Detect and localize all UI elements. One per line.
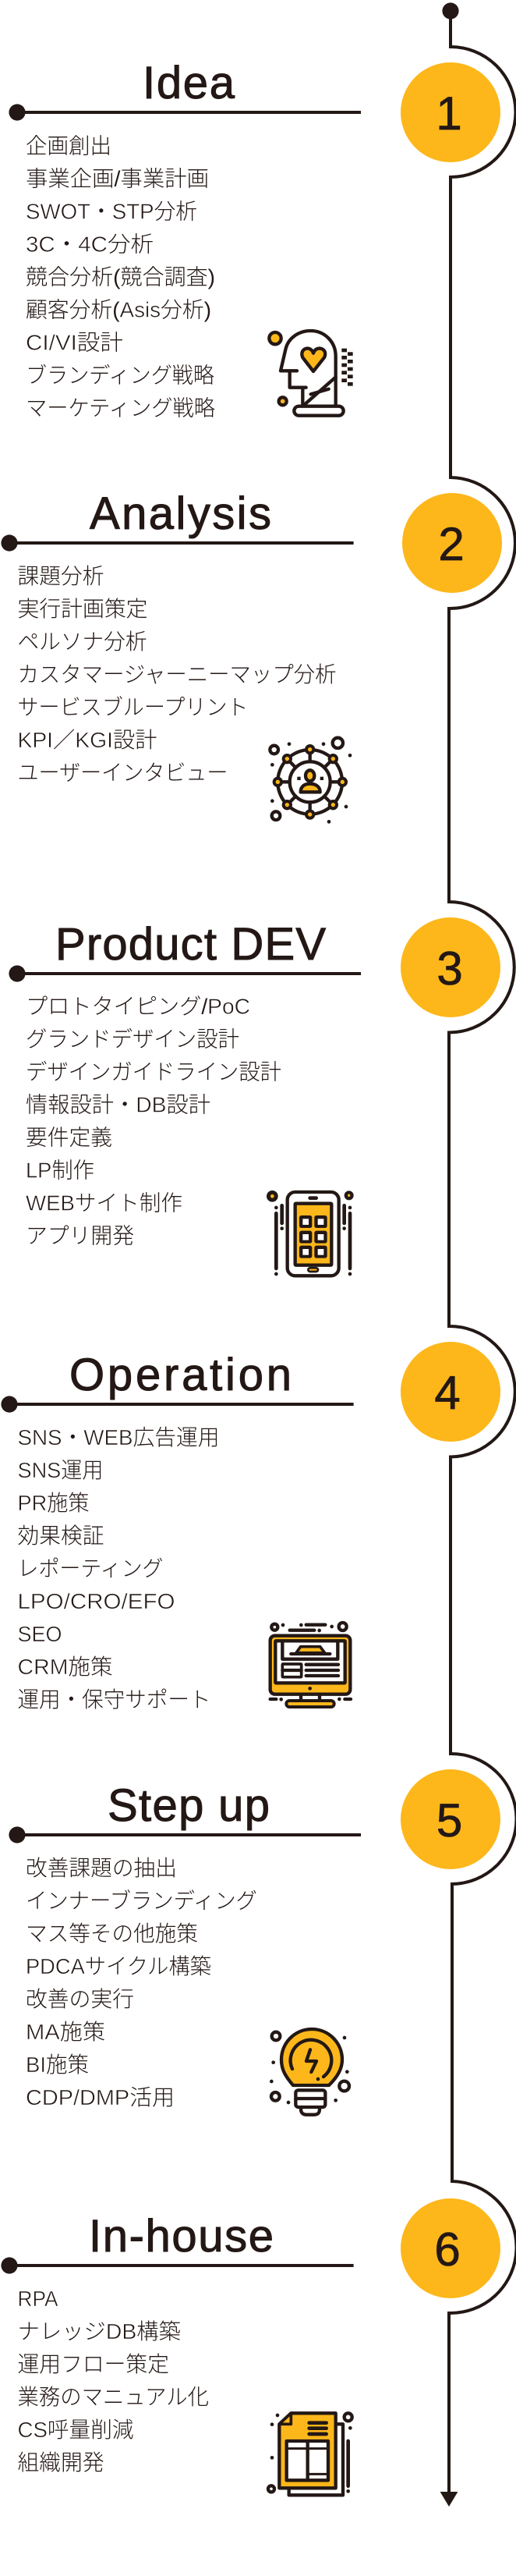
icon: documents: [268, 2413, 352, 2495]
text list: Product DEV: [26, 994, 281, 1248]
text list: Analysis: ペルソナ分析: [17, 630, 147, 654]
text list: Idea: 競合分析(競合調査): [26, 265, 215, 289]
icon: light bulb: [270, 2029, 349, 2115]
panel: Idea: [9, 58, 500, 420]
heading: Idea: Idea: [143, 58, 235, 108]
text list: Product DEV: デザインガイドライン設計: [26, 1059, 281, 1084]
text list: Product DEV: LP制作: [26, 1158, 94, 1183]
text list: Product DEV: 情報設計・DB設計: [26, 1092, 210, 1117]
text list: In-house: 組織開発: [17, 2450, 104, 2475]
text list: In-house: RPA: [17, 2287, 58, 2311]
heading: Product DEV: Product DEV: [55, 919, 326, 970]
timeline path: [449, 11, 516, 2493]
text list: Operation: レポーティング: [17, 1556, 164, 1581]
number badge 6: 6: [434, 2223, 461, 2276]
text list: Idea: 顧客分析(Asis分析): [26, 298, 211, 321]
heading rule with dot: [1, 534, 354, 552]
panel: In-house: [1, 2198, 500, 2495]
text list: Product DEV: アプリ開発: [26, 1223, 134, 1248]
heading rule with dot: [1, 2257, 354, 2274]
heading: Step up: Step up: [108, 1780, 270, 1831]
icon: monitor: [270, 1623, 351, 1707]
text list: Operation: PR施策: [17, 1491, 89, 1515]
text list: Idea: マーケティング戦略: [26, 396, 215, 420]
panel: Analysis: [1, 488, 502, 824]
number badge 3: 3: [436, 942, 463, 995]
number badge 6: [401, 2198, 500, 2298]
text list: Analysis: カスタマージャーニーマップ分析: [17, 662, 337, 687]
text list: Step up: BI施策: [26, 2053, 89, 2077]
text list: Operation: SNS運用: [17, 1458, 103, 1482]
text list: Analysis: KPI／KGI設計: [17, 728, 157, 752]
number badge 4: [401, 1342, 500, 1442]
text list: Idea: CI/VI設計: [26, 331, 123, 354]
number badge 3: [401, 917, 500, 1017]
text list: Operation: SEO: [17, 1622, 62, 1646]
text list: Product DEV: WEBサイト制作: [26, 1190, 182, 1215]
text list: Idea: 企画創出: [26, 134, 111, 158]
text list: Idea: 事業企画/事業計画: [26, 167, 209, 190]
text list: In-house: ナレッジDB構築: [17, 2319, 181, 2344]
text list: Product DEV: 要件定義: [26, 1125, 112, 1150]
text list: Step up: [26, 1856, 257, 2109]
text list: Step up: MA施策: [26, 2020, 105, 2044]
text list: Operation: CRM施策: [17, 1655, 112, 1679]
number badge 1: [401, 62, 500, 162]
text list: Idea: 3C・4C分析: [26, 232, 154, 256]
timeline start dot: [442, 2, 459, 20]
text list: Product DEV: グランドデザイン設計: [26, 1027, 239, 1052]
text list: Operation: SNS・WEB広告運用: [17, 1425, 220, 1449]
heading rule with dot: [9, 104, 361, 121]
heading: Operation: Operation: [69, 1350, 292, 1400]
text list: Step up: CDP/DMP活用: [26, 2085, 175, 2109]
text list: Product DEV: プロトタイピング/PoC: [26, 994, 250, 1019]
text list: Analysis: [17, 564, 337, 785]
number badge 5: [401, 1769, 500, 1869]
text list: Analysis: サービスブループリント: [17, 695, 248, 719]
number badge 4: 4: [434, 1367, 461, 1419]
heading: Analysis: Analysis: [90, 488, 271, 539]
text list: In-house: CS呼量削減: [17, 2418, 134, 2442]
text list: In-house: [17, 2287, 209, 2475]
heading rule with dot: [9, 1826, 361, 1843]
text list: Analysis: ユーザーインタビュー: [17, 761, 228, 785]
panel: Step up: [9, 1769, 500, 2115]
text list: In-house: 業務のマニュアル化: [17, 2385, 209, 2409]
heading rule with dot: [1, 1396, 354, 1413]
text list: Step up: 改善課題の抽出: [26, 1856, 177, 1880]
heading rule with dot: [9, 965, 361, 982]
timeline: vertical line with arcs and arrow: [440, 2, 516, 2507]
number badge 2: [402, 493, 502, 593]
number badge 1: 1: [436, 87, 462, 140]
text list: Idea: SWOT・STP分析: [26, 200, 197, 223]
icon: smartphone: [267, 1190, 354, 1276]
text list: Step up: PDCAサイクル構築: [26, 1954, 211, 1978]
number badge 2: 2: [438, 518, 465, 570]
text list: Operation: [17, 1425, 220, 1712]
text list: Step up: インナーブランディング: [26, 1889, 257, 1913]
text list: Analysis: 課題分析: [17, 564, 104, 588]
text list: Idea: ブランディング戦略: [26, 364, 214, 387]
number badge 5: 5: [436, 1794, 462, 1847]
timeline arrowhead: [440, 2492, 458, 2507]
heading: In-house: In-house: [89, 2211, 274, 2262]
text list: Step up: マス等その他施策: [26, 1921, 198, 1946]
icon: network with person: [270, 738, 352, 824]
icon: head with heart: [269, 331, 353, 416]
text list: Step up: 改善の実行: [26, 1987, 134, 2011]
panel: Product DEV: [9, 917, 500, 1276]
text list: Operation: 運用・保守サポート: [17, 1687, 210, 1712]
text list: In-house: 運用フロー策定: [17, 2352, 169, 2376]
text list: Analysis: 実行計画策定: [17, 597, 148, 621]
panel: Operation: [1, 1342, 500, 1712]
text list: Operation: 効果検証: [17, 1524, 104, 1548]
text list: Idea: [26, 134, 215, 420]
text list: Operation: LPO/CRO/EFO: [17, 1589, 175, 1613]
